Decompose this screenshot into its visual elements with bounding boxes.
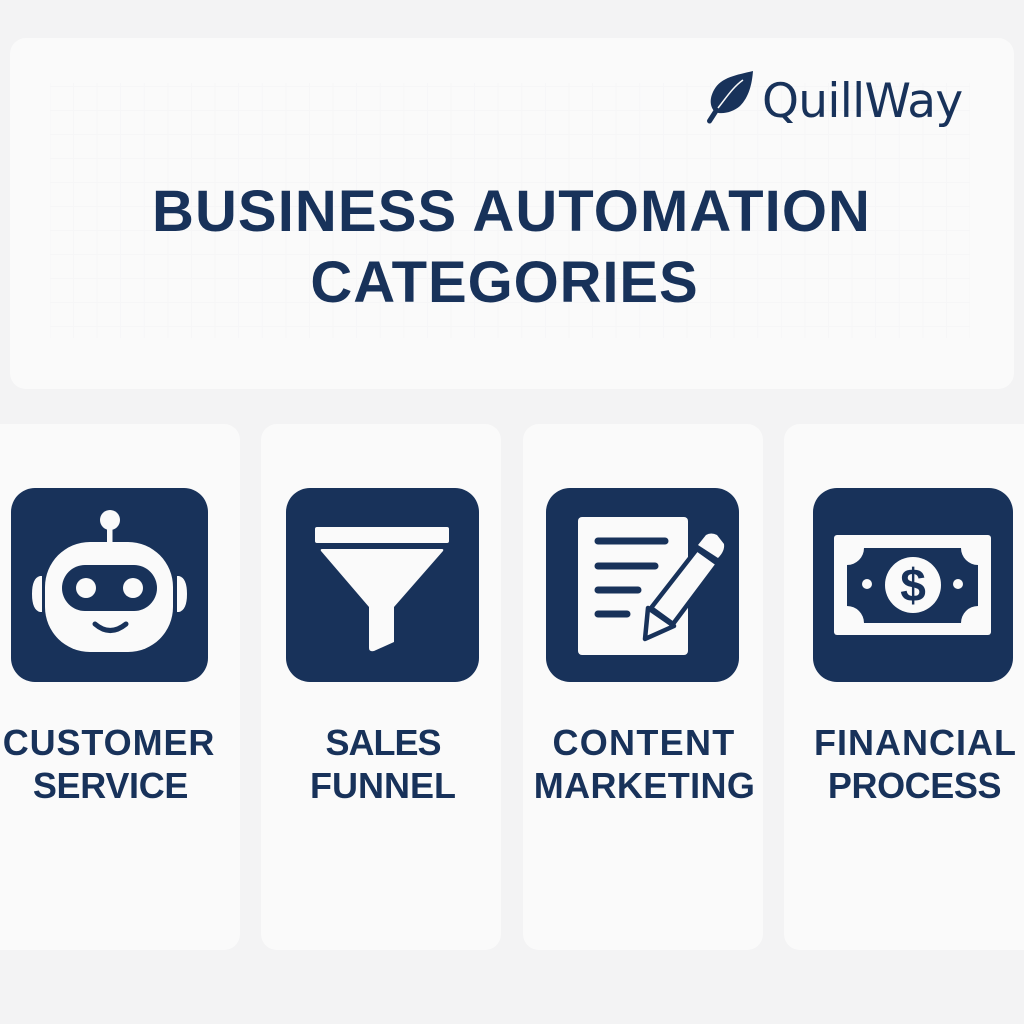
label line two: PROCESS bbox=[828, 765, 1001, 806]
panel: content marketing bbox=[523, 424, 763, 950]
icon: banknote bbox=[813, 488, 1013, 682]
panel: header bbox=[10, 38, 1014, 389]
icon: robot bbox=[11, 488, 208, 682]
logo: QuillWay bbox=[707, 71, 962, 129]
label line two: MARKETING bbox=[534, 765, 755, 806]
icon: document and pencil bbox=[546, 488, 739, 682]
title bbox=[152, 179, 871, 315]
label: CONTENT bbox=[552, 722, 736, 763]
icon: funnel bbox=[286, 488, 479, 682]
label line two: FUNNEL bbox=[310, 765, 456, 806]
icon: banknote: $ bbox=[900, 559, 926, 611]
panel: customer service bbox=[0, 424, 240, 950]
label: SALES bbox=[325, 722, 441, 763]
label: FINANCIAL bbox=[814, 722, 1017, 763]
icon: leaf bbox=[707, 71, 753, 124]
logo wordmark: QuillWay bbox=[762, 74, 962, 129]
label line two: SERVICE bbox=[33, 765, 188, 806]
panel: sales funnel bbox=[261, 424, 501, 950]
title: BUSINESS AUTOMATION bbox=[152, 179, 871, 244]
label: CUSTOMER bbox=[3, 722, 215, 763]
panel: financial process bbox=[784, 424, 1024, 950]
title: CATEGORIES bbox=[310, 250, 699, 315]
